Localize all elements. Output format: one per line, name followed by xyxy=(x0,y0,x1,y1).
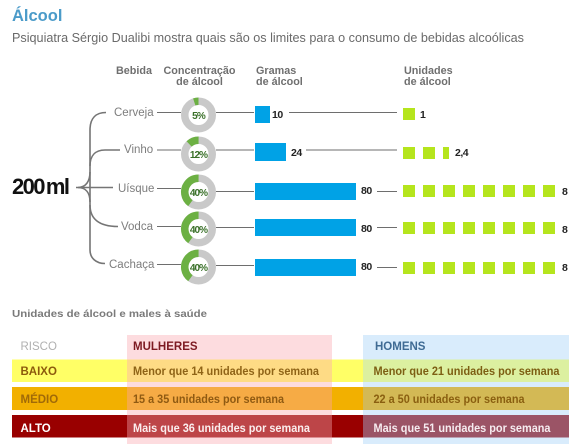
men's limits: Mais que 51 unidades por semana xyxy=(374,423,551,435)
risk table xyxy=(12,335,569,444)
column headers: Gramas xyxy=(256,65,296,77)
risk labels xyxy=(20,366,58,435)
panel: mulheres xyxy=(127,335,332,444)
row: Vinho: Vinho xyxy=(124,144,153,156)
men's limits: Menor que 21 unidades por semana xyxy=(374,366,560,378)
table header labels xyxy=(20,341,426,353)
row: Vinho: 24 xyxy=(291,147,302,159)
donut: 40%: 40% xyxy=(190,225,208,236)
column headers xyxy=(116,65,453,88)
men's limits: 22 a 50 unidades por semana xyxy=(374,394,525,406)
row: baixo xyxy=(12,360,569,382)
donut: 40%: 40% xyxy=(190,263,208,274)
row: Vodca: 8 xyxy=(562,224,568,236)
column headers: de álcool xyxy=(404,76,451,88)
column headers: Unidades xyxy=(404,65,453,77)
row: Cachaça: Cachaça xyxy=(109,259,155,271)
row: Uísque: 80 xyxy=(361,185,372,197)
row: médio xyxy=(12,387,569,410)
row: Uísque: 8 xyxy=(562,186,568,198)
donut: 5%: 5% xyxy=(192,111,206,122)
section heading: Unidades de álcool e males à saúde xyxy=(12,308,207,320)
row: Cerveja: 1 xyxy=(420,109,426,121)
panel: homens xyxy=(363,335,569,444)
donut: 40%: 40% xyxy=(190,188,208,199)
row: Uísque xyxy=(118,173,568,211)
row: Cerveja: Cerveja xyxy=(114,107,154,119)
row: Vinho: 2,4 xyxy=(455,147,469,159)
row: Vodca: Vodca xyxy=(121,221,154,233)
volume label: 200 ml xyxy=(12,174,69,199)
table header labels: RISCO xyxy=(20,341,57,353)
donut: 40% xyxy=(179,248,218,286)
risk labels: BAIXO xyxy=(20,366,57,378)
risk labels: ALTO xyxy=(20,423,51,435)
row: Cachaça: 80 xyxy=(361,261,372,273)
donut: 40% xyxy=(179,173,218,211)
donut: 12% xyxy=(179,135,218,173)
women's limits: 15 a 35 unidades por semana xyxy=(133,394,285,406)
table header labels: MULHERES xyxy=(133,341,198,353)
row: Uísque: Uísque xyxy=(118,183,154,195)
women's limits xyxy=(133,366,320,435)
row: Vinho xyxy=(124,135,469,173)
risk labels: MÉDIO xyxy=(20,393,58,406)
bracket connecting volume to drinks xyxy=(76,112,120,264)
women's limits: Mais que 36 unidades por semana xyxy=(133,423,311,435)
subtitle: Psiquiatra Sérgio Dualibi mostra quais são os limites para o consumo de bebidas alcoólicas xyxy=(12,31,524,45)
row: Cerveja xyxy=(114,98,426,132)
row: alto xyxy=(12,415,569,438)
column headers: de álcool xyxy=(176,76,223,88)
column headers: de álcool xyxy=(256,76,303,88)
row: Cerveja: 10 xyxy=(272,109,283,121)
donut: 5% xyxy=(181,98,216,132)
column headers: Bebida xyxy=(116,65,153,77)
row: Cachaça xyxy=(109,248,568,286)
donut: 12%: 12% xyxy=(190,150,208,161)
row: Vodca xyxy=(121,210,568,248)
row: Vodca: 80 xyxy=(361,223,372,235)
title: Álcool xyxy=(12,6,62,25)
women's limits: Menor que 14 unidades por semana xyxy=(133,366,320,378)
donut: 40% xyxy=(179,210,218,248)
table header labels: HOMENS xyxy=(375,341,426,353)
row: Cachaça: 8 xyxy=(562,262,568,274)
men's limits xyxy=(374,366,560,435)
column headers: Concentração xyxy=(164,65,236,77)
